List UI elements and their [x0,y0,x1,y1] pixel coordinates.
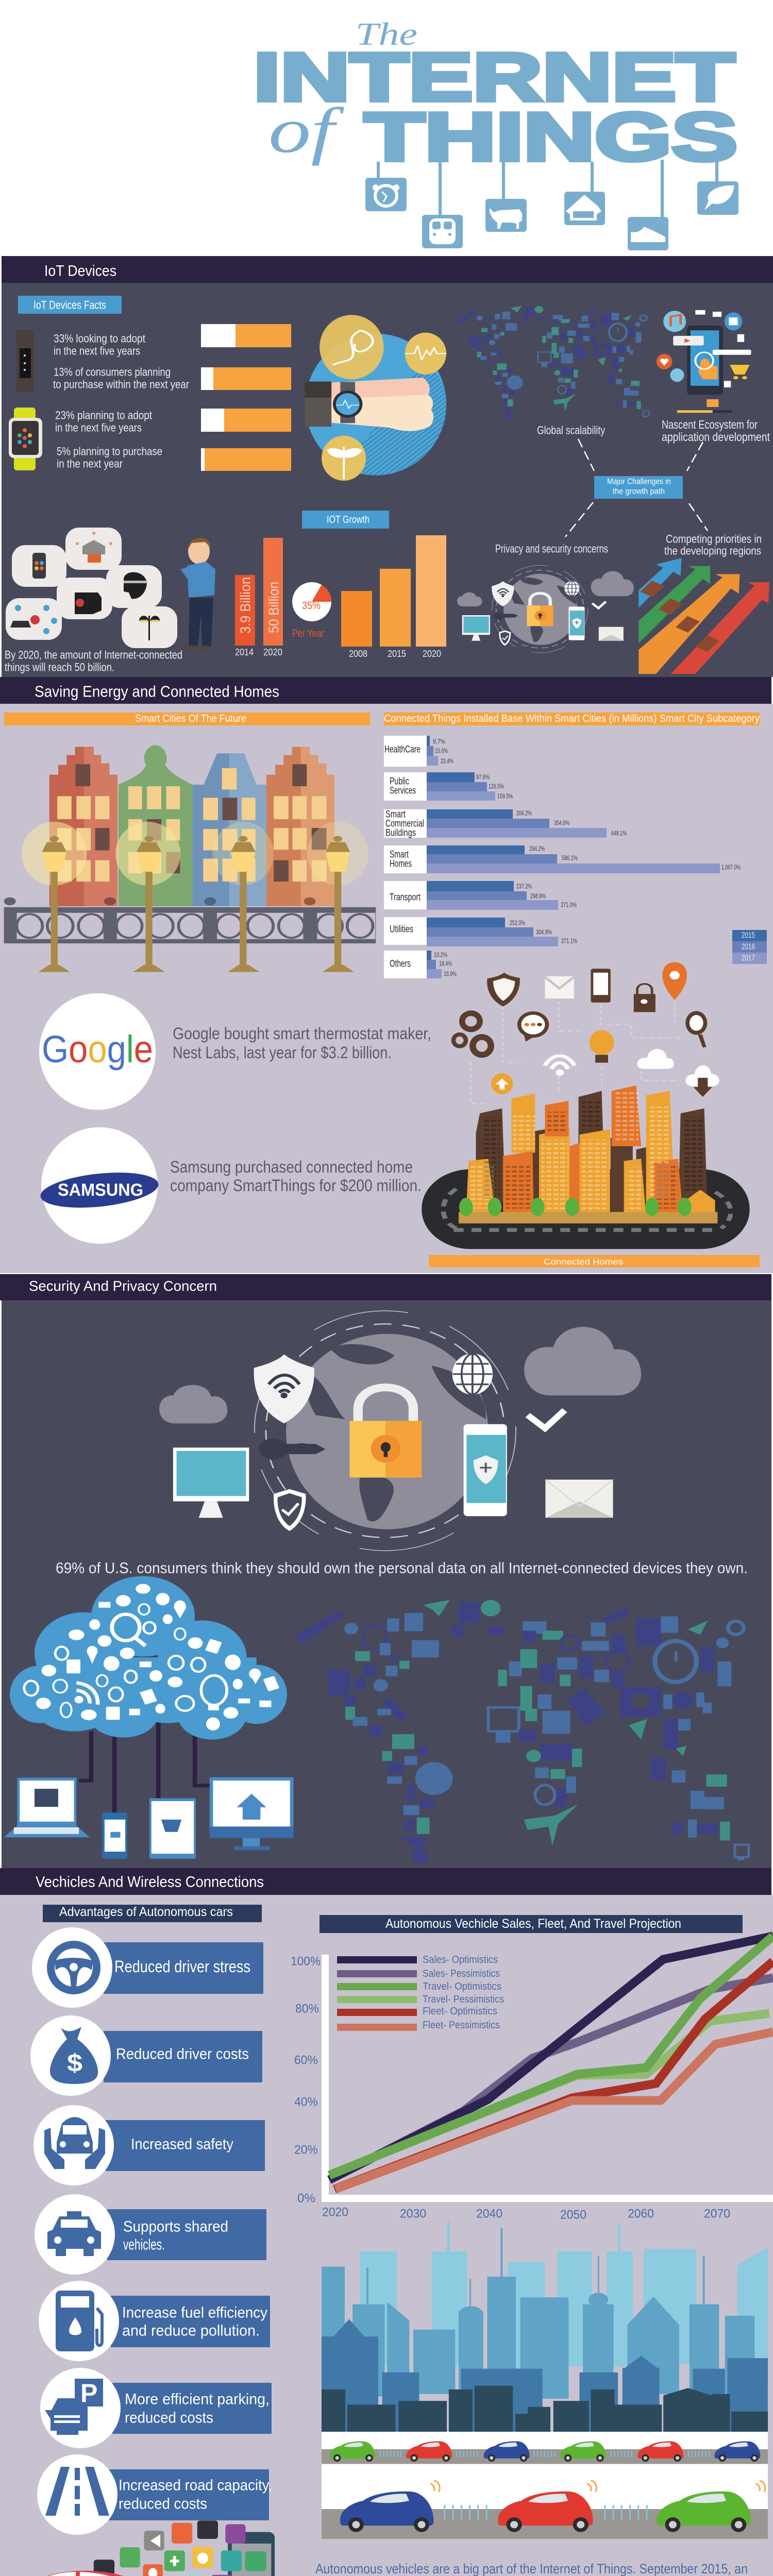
bar chart: smart city subcategories: 33.9% [444,970,457,978]
label: advantages: Advantages of Autonomous cars [59,1905,233,1919]
hanging icons [365,160,738,250]
advantage: shared vehicles: Supports shared [123,2218,228,2235]
advantage: road capacity [37,2454,272,2535]
advantage: safety [33,2105,265,2185]
line chart: projection: 60% [294,2054,318,2067]
line chart: projection: 20% [294,2143,318,2157]
bar chart: smart city subcategories: 126.5% [489,782,504,790]
heading: security and privacy [0,1274,771,1300]
text: Samsung acquisition [170,1158,422,1195]
label: IoT devices facts [18,296,122,314]
bar chart: smart city subcategories: 9.7% [433,738,445,745]
bar chart: smart city subcategories: Smart [385,809,406,820]
line chart: projection: 2070 [704,2207,730,2221]
bar chart: smart city subcategories: Smart [390,849,409,860]
advantage: fuel efficiency: and reduce pollution. [122,2323,260,2339]
line chart: projection: 2060 [628,2207,654,2221]
bar chart: billions of devices: 2020 [263,647,282,657]
advantage: road capacity: Increased road capacity, [119,2477,272,2494]
advantage: parking: More efficient parking, [125,2391,270,2408]
label: connected homes: Connected Homes [544,1257,623,1266]
icon map: world of connected things [296,1600,749,1863]
bar chart: smart city subcategories: 304.9% [536,928,552,936]
bar chart: IoT growth [341,535,446,659]
pie chart: 35% per year: 35% [302,600,321,612]
line chart: projection: 2030 [400,2207,426,2221]
title [254,17,737,175]
title: INTERNET [254,39,735,115]
bar chart: smart city subcategories: 298.9% [530,892,546,900]
bar chart: smart city subcategories: 206.2% [516,809,532,817]
title: THINGS [364,99,737,175]
advantage: driver costs: $ [67,2049,82,2077]
line chart: projection: 40% [294,2095,318,2109]
advantage: driver stress [32,1927,263,2008]
pie chart: 35% per year [292,582,331,639]
illustration: app phone [657,310,751,413]
icon tiles: connected things [6,528,177,648]
bar chart: smart city subcategories: 371.1% [561,937,577,945]
advantage: fuel efficiency: Increase fuel efficiency [122,2304,267,2321]
bar chart: IoT growth: 2015 [388,649,406,659]
label: smart cities: Smart Cities Of The Future [135,713,246,724]
illustration: smart city houses [4,745,376,943]
heading: saving energy [0,677,771,704]
bar chart: smart city subcategories: 15.0% [435,747,448,754]
chart legend: Sales- Optimistics [423,1954,498,1965]
illustration: city skyline [322,2222,768,2433]
illustration: cloud with devices [4,1576,293,1859]
bar chart: smart city subcategories: 237.2% [516,882,532,890]
logo: Google [39,993,156,1110]
text: 50 billion by 2020: By 2020, the amount of Internet-connected [5,648,182,662]
text: Samsung acquisition: Samsung purchased connected home [170,1158,413,1176]
chart legend: Fleet- Optimistics [423,2006,497,2017]
bar chart: smart city subcategories: Transport [390,892,421,903]
chart legend: Fleet- Pessimistics [423,2020,500,2031]
advantage: fuel efficiency [39,2281,270,2361]
label: smart cities [4,713,370,725]
title: of [268,95,345,166]
facts text: 13% of consumers planning [54,366,171,378]
chart legend: Travel- Optimistics [423,1981,501,1992]
bar chart: smart city subcategories: 252.0% [510,919,525,926]
bar chart: smart city subcategories: 586.1% [562,854,578,861]
bar chart: smart city subcategories: Homes [390,858,412,870]
logo: Google: Google [42,1028,153,1071]
icon: smart watch [9,408,42,470]
illustration: street lamps [22,822,368,972]
facts text: in the next five years [54,344,140,358]
line chart: projection: 80% [295,2002,319,2015]
label: IoT devices facts: IoT Devices Facts [33,299,106,311]
callout: major challenges: the growth path [613,487,665,496]
legend: years: 2015 [742,931,755,940]
heading: saving energy: Saving Energy and Connected Homes [35,682,279,701]
section background: vehicles [0,1895,773,2576]
advantage: parking: P [80,2379,97,2408]
icon: fitness band [16,330,34,393]
labels: major challenges: Global scalability [537,423,605,437]
heading: vehicles: Vechicles And Wireless Connections [36,1873,264,1891]
section background: saving energy [0,704,773,1273]
labels: major challenges [495,418,770,557]
bar chart: smart city subcategories: 371.0% [561,901,577,909]
callout: major challenges: Major Challenges in [607,477,671,486]
facts text: 23% planning to adopt [55,409,152,421]
section background: IoT devices [2,283,773,677]
logo: Samsung: SAMSUNG [58,1180,143,1200]
bar chart: billions of devices: 50 Billion [266,582,281,633]
bar chart: smart city subcategories: 294.2% [529,845,545,852]
label: advantages [43,1905,262,1922]
title: The [356,17,417,52]
bar chart: smart city subcategories: 10.2% [434,951,447,958]
chart heading: projection [320,1915,743,1933]
illustration: health wrist watch [305,315,446,481]
bar chart: IoT growth: 2020 [423,649,441,659]
chart legend: Travel- Pessimistics [423,1994,504,2005]
facts text: in the next year [57,457,123,470]
advantage: road capacity: reduced costs [119,2496,207,2512]
bar chart: IoT growth: 2008 [349,649,367,659]
facts text [53,332,189,470]
pie chart: 35% per year: Per Year [292,628,324,639]
labels: major challenges: Privacy and security concerns [495,542,608,555]
figure: man pointing [180,538,215,650]
label: IOT growth: IOT Growth [327,514,369,526]
line chart: projection: 2050 [560,2208,586,2222]
line chart: projection: 2020 [322,2205,348,2219]
bar chart: smart city subcategories: Public [390,776,409,787]
bar chart: smart city subcategories: Others [390,958,411,970]
heading: vehicles [0,1868,771,1895]
bar chart: smart city subcategories: Utilities [390,924,413,935]
line chart: projection: 0% [297,2192,315,2205]
bar chart: smart city subcategories: 97.8% [476,773,490,781]
bar chart: smart city subcategories [384,736,741,978]
text: Google acquisition: Google bought smart thermostat maker, [173,1024,431,1043]
advantage: shared vehicles [35,2194,266,2275]
advantage: parking [40,2368,272,2448]
illustration: red car [9,2571,185,2576]
bar chart: billions of devices: 3.9 Billion [237,577,254,634]
line chart: projection [291,1936,773,2222]
illustration: connected cars [322,2432,768,2539]
section background: security [2,1300,771,1869]
bar chart: smart city subcategories: HealthCare [384,744,421,755]
line chart: projection: 2040 [476,2207,502,2221]
bar chart: smart city subcategories: 159.5% [497,792,513,800]
advantage: parking: reduced costs [125,2409,213,2427]
advantage: driver stress: Reduced driver stress [114,1957,250,1976]
bar chart: smart city subcategories: Buildings [385,827,416,839]
bar chart: smart city subcategories: 648.1% [611,829,627,837]
bar chart: smart city subcategories: 1,067.0% [721,863,741,871]
illustration: security small [457,565,634,653]
facts text: 5% planning to purchase [57,445,162,457]
chart heading: projection: Autonomous Vechicle Sales, Fleet, And Travel Projection [385,1917,681,1931]
text: Google acquisition [173,1024,431,1062]
illustration: app icons [94,2520,275,2576]
illustration: connected city [422,962,750,1249]
bar chart: billions of devices: 2014 [235,647,254,657]
callout: major challenges [594,476,683,499]
legend: years: 2017 [742,954,755,962]
logo: Samsung [39,1127,160,1244]
legend: years: 2016 [742,943,755,951]
bar chart: billions of devices [235,538,283,657]
advantage: driver costs [30,2015,262,2096]
legend: years [732,930,767,964]
text: Samsung acquisition: company SmartThings for $200 million. [170,1176,422,1195]
bar chart: smart city subcategories: 354.6% [554,819,569,826]
bar chart: smart city subcategories: Services [390,785,416,796]
text: 50 billion by 2020 [5,648,182,674]
bar chart: smart city subcategories: Commercial [385,818,424,829]
text: Google acquisition: Nest Labs, last year for $3.2 billion. [173,1043,392,1062]
heading: IoT Devices [2,256,773,283]
line chart: projection: 100% [291,1955,321,1968]
facts text: in the next five years [55,421,142,434]
label: IOT growth [302,511,389,529]
facts text: to purchase within the next year [53,378,189,391]
advantage: driver costs: Reduced driver costs [116,2045,249,2063]
percentage bars [201,324,291,471]
facts text: 33% looking to adopt [54,332,145,345]
icon map: global IoT small [456,306,649,419]
chart legend [337,1954,504,2031]
label: connected homes [429,1255,760,1267]
text: 50 billion by 2020: things will reach 50 billion. [5,660,114,674]
advantage: shared vehicles: vehicles. [123,2236,165,2253]
bar chart: smart city subcategories: 18.4% [439,959,452,968]
heading: IoT Devices: IoT Devices [44,263,116,279]
bar chart: smart city subcategories: 23.4% [441,757,453,765]
dashed connectors [565,439,708,537]
illustration: security globe [159,1311,641,1551]
chart legend: Sales- Pessimistics [423,1968,500,1979]
heading: security and privacy: Security And Privacy Concern [29,1278,217,1294]
illustration: priority arrows [638,558,769,674]
advantage: safety: Increased safety [131,2136,233,2153]
